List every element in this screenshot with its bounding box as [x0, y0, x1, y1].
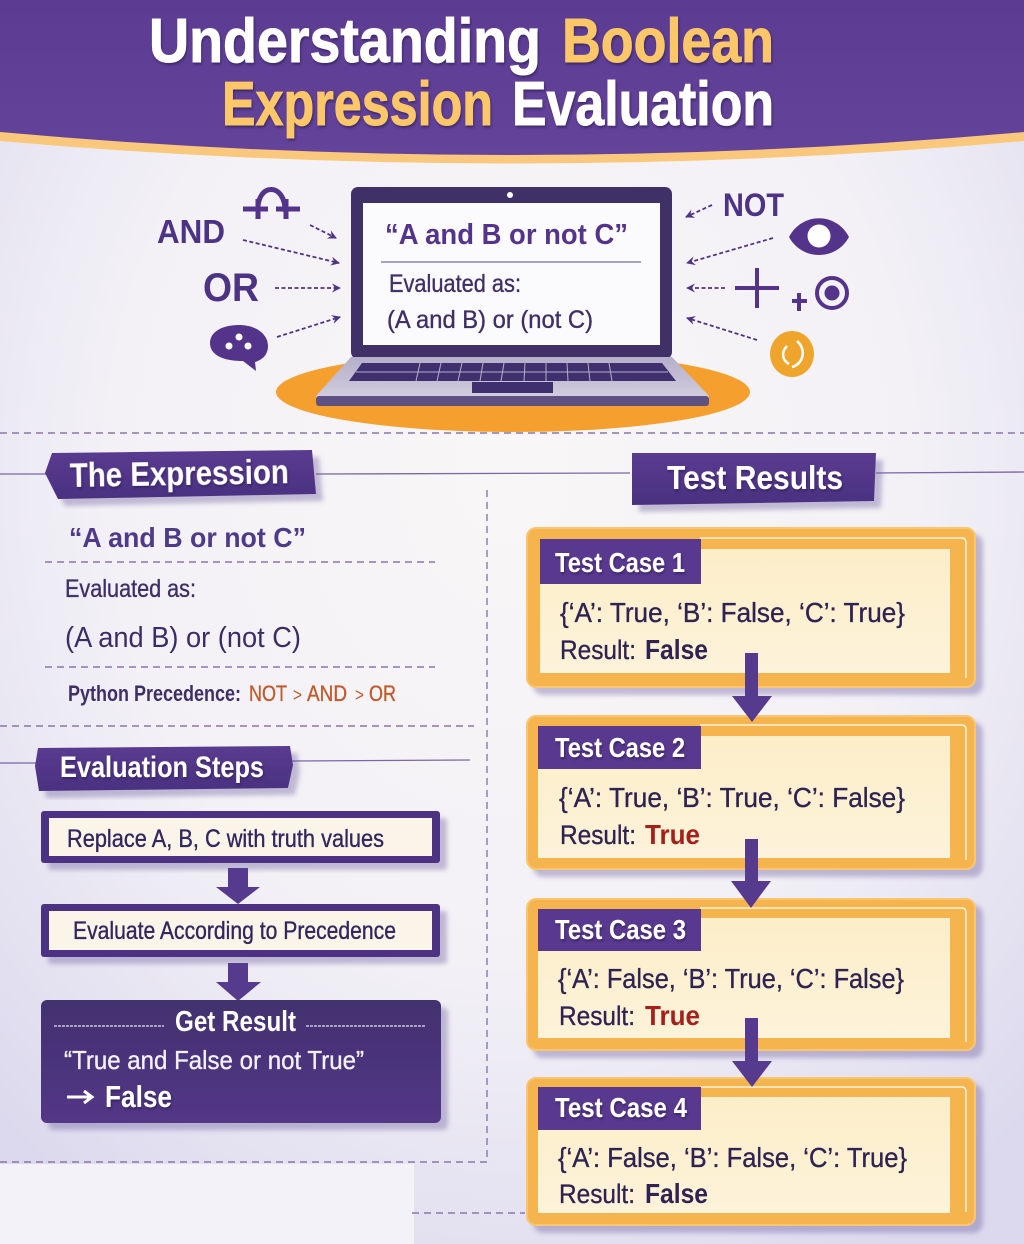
screen text	[381, 219, 641, 334]
icon: arch with plus signs	[243, 190, 300, 219]
test case 4: {‘A’: False, ‘B’: False, ‘C’: True}	[558, 1142, 907, 1173]
arrow: case 1 to 2	[732, 653, 772, 722]
arrow: case 2 to 3	[731, 839, 771, 908]
icon: gold coin	[770, 331, 814, 377]
step 3: get result	[41, 1000, 441, 1123]
arrow	[216, 868, 260, 904]
heading: the expression: The Expression	[69, 453, 289, 495]
test case 3: {‘A’: False, ‘B’: True, ‘C’: False}	[558, 963, 904, 994]
test case 4: Result:	[559, 1179, 635, 1209]
test case 3: Test Case 3	[555, 914, 686, 945]
test case 2: {‘A’: True, ‘B’: True, ‘C’: False}	[559, 782, 905, 813]
title: Boolean	[562, 7, 774, 76]
title: Understanding	[149, 7, 541, 76]
title: Expression	[222, 70, 493, 139]
test case 3: Result:	[559, 1001, 635, 1031]
step 1: Replace A, B, C with truth values	[67, 825, 384, 853]
step 2: Evaluate According to Precedence	[73, 917, 396, 945]
icon: plus and target	[735, 268, 847, 311]
icon: eye	[789, 218, 849, 255]
test case 1: {‘A’: True, ‘B’: False, ‘C’: True}	[560, 597, 905, 628]
precedence line: NOT	[249, 681, 287, 706]
panel: test results	[527, 453, 975, 1225]
title: Evaluation	[512, 70, 774, 139]
test case 1: Result:	[560, 635, 636, 665]
label: OR: OR	[203, 266, 259, 310]
section dividers	[0, 433, 1024, 1213]
test case 4: Test Case 4	[555, 1092, 687, 1123]
test case 2: Result:	[560, 820, 636, 850]
test case 4: False	[645, 1178, 708, 1209]
step 2	[41, 904, 440, 957]
step 3: get result: Get Result	[175, 1006, 296, 1038]
icon: speech bubble	[210, 325, 268, 371]
heading: evaluation steps	[35, 746, 293, 791]
lighter bottom-left strip	[0, 1164, 414, 1244]
precedence line: >	[355, 685, 364, 705]
screen text: Evaluated as:	[389, 270, 521, 298]
evaluated as: Evaluated as:	[65, 575, 196, 603]
arrow: case 3 to 4	[732, 1018, 772, 1087]
heading: test results: Test Results	[667, 459, 843, 496]
panel: the expression	[45, 450, 435, 706]
test case 4	[527, 1078, 975, 1225]
dashed arrows	[243, 205, 773, 340]
orange ellipse	[276, 352, 750, 432]
title	[149, 7, 774, 139]
test case 2: True	[645, 819, 700, 850]
test case 1: Test Case 1	[555, 547, 685, 578]
header banner	[0, 0, 1024, 164]
quoted expression: “A and B or not C”	[69, 522, 306, 553]
heading: evaluation steps: Evaluation Steps	[60, 751, 264, 784]
test case 3	[527, 899, 975, 1050]
test case 2: Test Case 2	[555, 732, 685, 763]
precedence line: Python Precedence:	[68, 681, 241, 706]
label: NOT: NOT	[723, 187, 784, 223]
illustration: laptop with operators	[157, 187, 849, 432]
screen text: “A and B or not C”	[385, 219, 628, 251]
heading: test results	[632, 453, 876, 505]
step 1	[41, 811, 440, 863]
precedence line: >	[293, 685, 302, 705]
panel: evaluation steps	[35, 746, 441, 1123]
screen text: (A and B) or (not C)	[387, 306, 593, 334]
precedence line: AND	[307, 681, 347, 706]
test case 3: True	[645, 1000, 700, 1031]
precedence line: OR	[369, 681, 396, 706]
test case 1: False	[645, 634, 708, 665]
arrow	[216, 963, 261, 1001]
step 3: get result: “True and False or not True”	[64, 1045, 364, 1075]
test case 1	[527, 528, 975, 687]
test case 2	[527, 716, 975, 869]
label: AND: AND	[157, 213, 225, 250]
precedence line	[68, 681, 396, 706]
step 3: get result: False	[105, 1079, 172, 1114]
parenthesized expression: (A and B) or (not C)	[65, 622, 301, 654]
laptop	[316, 187, 709, 406]
